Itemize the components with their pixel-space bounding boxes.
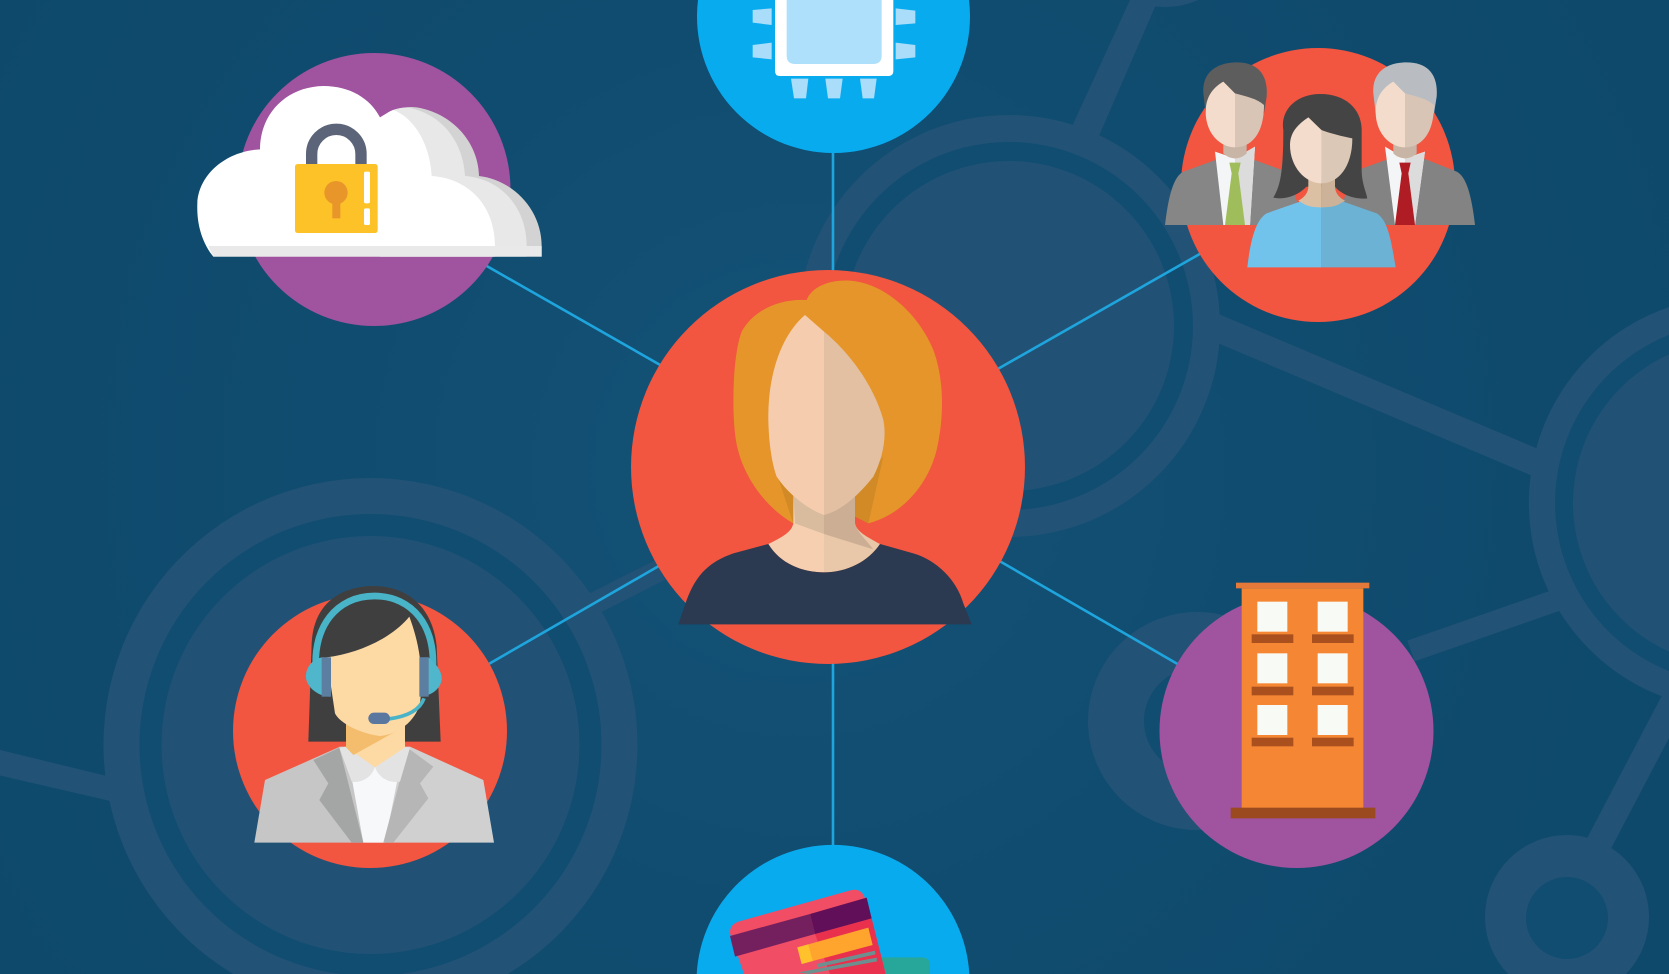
node: cloud security <box>197 53 542 326</box>
node: payment cards <box>697 845 969 974</box>
icon: agent with headset <box>254 586 494 843</box>
woman <box>1247 94 1396 267</box>
node: office building <box>1160 583 1434 868</box>
icon: credit cards <box>730 890 930 974</box>
left man <box>1165 62 1305 225</box>
red circle <box>631 270 1025 664</box>
central node: customer <box>631 270 1025 664</box>
icon: chip <box>753 0 915 98</box>
icon: building <box>1231 583 1375 818</box>
purple circle <box>1160 594 1434 868</box>
blue circle <box>697 845 969 974</box>
icon: three people <box>1165 62 1475 267</box>
blue circle <box>697 0 970 153</box>
node: business team <box>1165 48 1475 322</box>
right man <box>1335 62 1475 225</box>
purple circle <box>238 53 510 326</box>
connector lines <box>485 150 1205 848</box>
node: call centre agent <box>233 586 507 868</box>
red circle <box>233 594 507 868</box>
node: microchip <box>697 0 970 153</box>
icon: woman with orange hair <box>678 281 972 624</box>
red circle <box>1181 48 1455 322</box>
icon: cloud with padlock <box>197 86 542 257</box>
